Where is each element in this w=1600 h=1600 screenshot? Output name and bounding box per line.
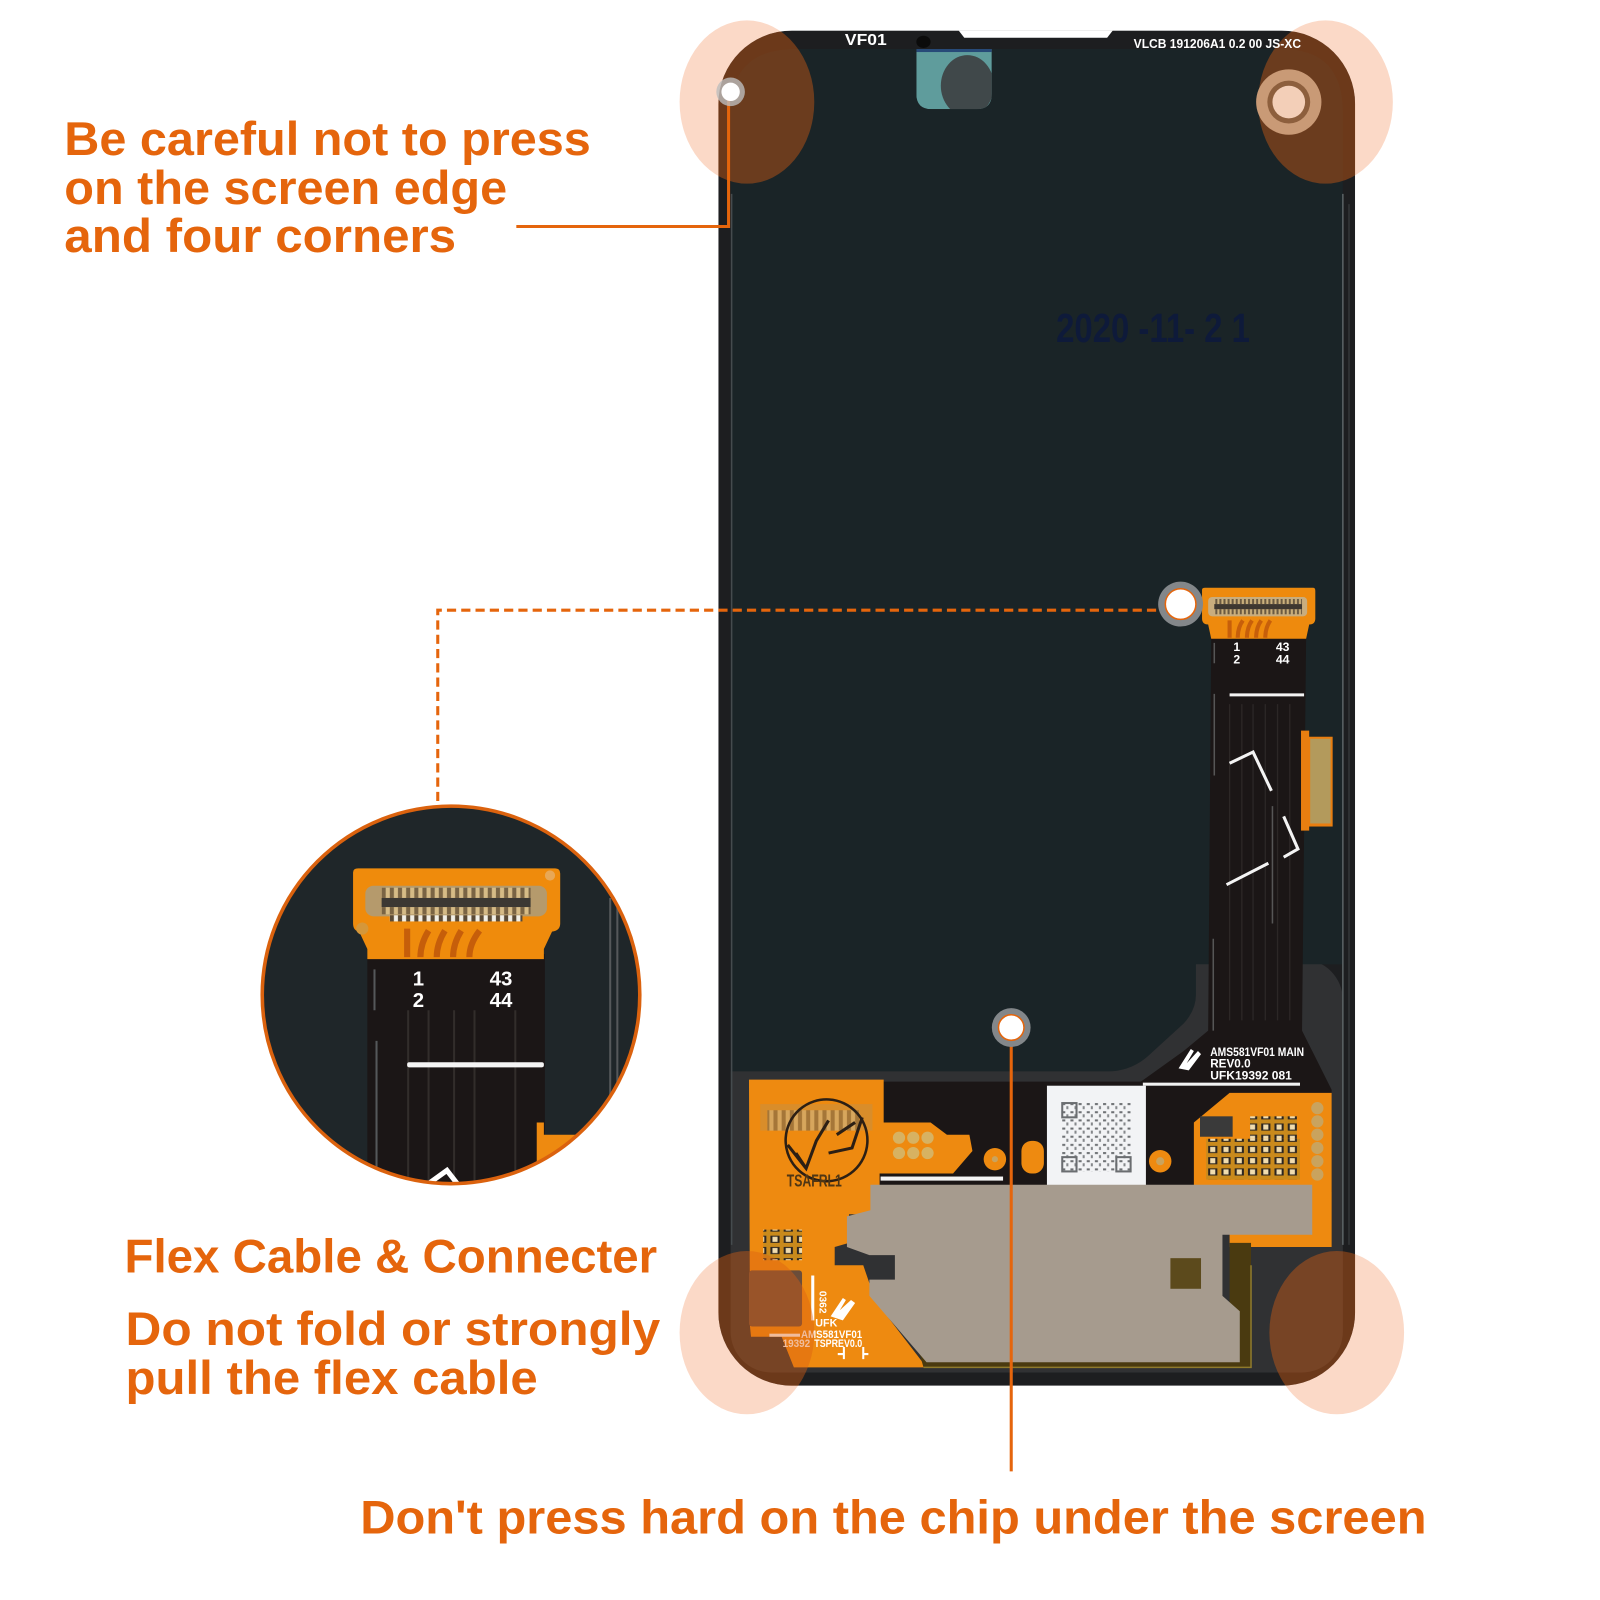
- phone screen assembly: [718, 30, 1356, 1386]
- white rule: [1143, 1083, 1300, 1086]
- text: flex cable heading: Flex Cable & Connecter: [124, 1230, 657, 1282]
- shield window: [1170, 1258, 1201, 1289]
- magnified connector: [353, 868, 560, 959]
- magnified pin labels: 43: [490, 969, 512, 991]
- screen back panel: [730, 959, 1322, 1072]
- lower left print: UFK: [815, 1318, 838, 1330]
- screen frame: [718, 31, 1355, 1386]
- top notch: [958, 30, 1113, 38]
- frame edge lines: [732, 194, 1349, 1245]
- main flex print: AMS581VF01 MAIN: [1210, 1046, 1304, 1059]
- sensor hole: [916, 36, 931, 48]
- panel code VF01: VF01: [845, 32, 887, 49]
- flex pin labels: [1234, 642, 1290, 664]
- flex pin labels: 43: [1276, 640, 1290, 654]
- left board connector and scribble: [760, 1099, 934, 1191]
- text: press warning: [64, 113, 591, 262]
- rear camera ring: [1256, 69, 1321, 135]
- magnified pin labels: 1: [413, 969, 424, 991]
- flex cable: [878, 638, 1332, 1192]
- marker: edge: [716, 78, 745, 106]
- marker: chip: [992, 1008, 1031, 1047]
- main flex print: REV0.0: [1210, 1057, 1251, 1070]
- panel code VLCB: VLCB 191206A1 0.2 00 JS-XC: [1134, 36, 1301, 51]
- text: press warning: Be careful not to press: [64, 113, 591, 165]
- flex pin labels: 2: [1233, 652, 1240, 666]
- text: press warning: on the screen edge: [64, 162, 507, 214]
- corner highlight overlays: [718, 32, 1356, 1386]
- left board: [749, 1080, 972, 1367]
- left board connector and scribble: TSAFRL1: [787, 1171, 842, 1191]
- gold edge under shield: [898, 1243, 1251, 1367]
- date stamp: 2020 -11- 2 1: [1056, 305, 1250, 351]
- lower left print: [769, 1276, 868, 1359]
- marker: connector: [1158, 582, 1203, 627]
- magnified pin labels: 2: [413, 990, 424, 1012]
- text: flex cable warning: [126, 1303, 660, 1404]
- flex pin labels: 44: [1276, 652, 1290, 666]
- magnified white mark: [407, 1062, 544, 1067]
- lower left print: 0362: [816, 1291, 827, 1314]
- main flex print: UFK19392 081: [1210, 1070, 1292, 1083]
- magnifier: connector detail: [262, 806, 640, 1199]
- callout line: chip: [1010, 1028, 1013, 1471]
- middle pads: [984, 1141, 1171, 1173]
- flex traces: [1213, 643, 1290, 1031]
- lower left print: AMS581VF01: [801, 1329, 862, 1341]
- right board: [1194, 1093, 1332, 1247]
- magnified pin labels: 44: [490, 990, 513, 1012]
- text: flex cable warning: Do not fold or strongly: [126, 1303, 660, 1355]
- lower left components: [749, 1230, 802, 1327]
- white rule on black board: [881, 1177, 1003, 1181]
- logo mark: [1179, 1049, 1201, 1070]
- gold side tab: [1301, 731, 1333, 831]
- text: chip warning: Don't press hard on the chip under the screen: [360, 1492, 1427, 1544]
- text: press warning: and four corners: [64, 210, 456, 262]
- text: flex cable warning: pull the flex cable: [126, 1352, 538, 1404]
- corner highlights: soft halo outside screen: [680, 20, 1404, 1414]
- magnified pin labels: [413, 972, 512, 1007]
- main flex print: [1210, 1048, 1304, 1080]
- callout line: connector: [438, 610, 1163, 801]
- lower left print: 19392: [783, 1338, 810, 1350]
- front camera window: [916, 49, 992, 109]
- lower left print: TSPREV0.0: [814, 1338, 862, 1350]
- flex white marks: [1227, 695, 1304, 885]
- lower panel: [731, 959, 1343, 1372]
- callout line: edges: [516, 97, 729, 227]
- magnified cable: [367, 954, 545, 1199]
- metal shield: [847, 1185, 1312, 1362]
- QR label: [1047, 1086, 1146, 1186]
- right board components: [1200, 1102, 1323, 1181]
- flex pin labels: 1: [1233, 640, 1240, 654]
- magnified gold tab: [536, 1122, 576, 1162]
- flex connector: [1202, 588, 1315, 639]
